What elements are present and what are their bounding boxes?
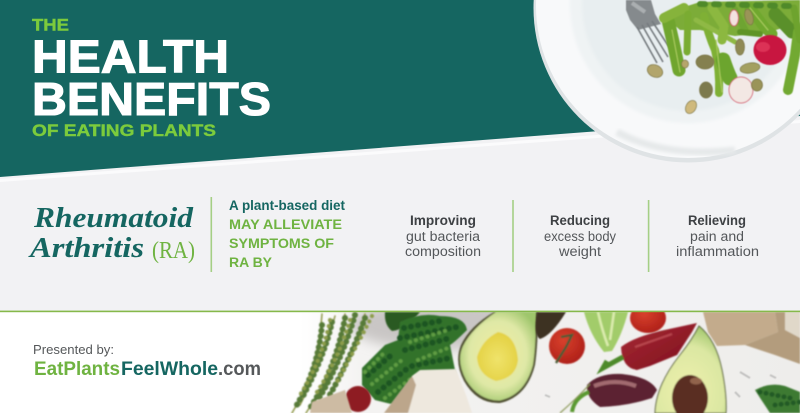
text block: improving: composition — [405, 244, 481, 259]
avocado right — [655, 326, 726, 413]
text block: improving: Improving — [410, 213, 476, 228]
thyme sprigs — [292, 314, 372, 413]
text block: relieving: inflammation — [676, 244, 759, 259]
fork — [626, 0, 673, 63]
kale — [362, 315, 467, 405]
divider: second — [648, 200, 649, 272]
paper bags — [310, 369, 472, 413]
footer top rule — [0, 311, 800, 312]
title — [32, 16, 271, 140]
eggplant pepper — [560, 374, 657, 413]
text block: reducing: weight — [558, 244, 601, 259]
tomato top — [629, 312, 667, 334]
panel: rheumatoid arthritis heading: Arthritis — [28, 232, 144, 264]
text block: reducing: excess body — [544, 229, 616, 244]
brown paper — [703, 312, 800, 364]
plate — [534, 0, 800, 162]
plate photo with salad — [534, 0, 800, 162]
title: THE — [32, 16, 69, 34]
red pepper — [603, 323, 697, 370]
text block: relieving — [676, 213, 759, 259]
presenter credit: EatPlants — [34, 358, 120, 380]
divider: heading — [210, 197, 212, 272]
title: HEALTH — [32, 30, 229, 82]
pumpkin seeds — [645, 8, 762, 116]
text block: relieving: pain and — [690, 229, 744, 244]
text block: diet statement — [229, 198, 345, 271]
text block: relieving: Relieving — [688, 213, 746, 228]
radish — [729, 10, 786, 103]
marble background — [0, 312, 800, 413]
text block: diet statement: MAY ALLEVIATE — [229, 217, 342, 233]
footer photo: vegetables on marble — [0, 312, 800, 413]
text block: diet statement: RA BY — [229, 255, 273, 271]
text block: reducing — [544, 213, 616, 259]
presenter credit — [33, 342, 261, 380]
text block: improving: gut bacteria — [406, 229, 481, 244]
panel: rheumatoid arthritis heading: (RA) — [152, 238, 195, 264]
arugula leaves — [662, 0, 800, 93]
dark pepper top — [536, 312, 566, 339]
text block: diet statement: A plant-based diet — [229, 198, 345, 213]
text block: diet statement: SYMPTOMS OF — [229, 236, 334, 252]
panel: rheumatoid arthritis heading — [28, 202, 195, 264]
text block: reducing: Reducing — [550, 213, 610, 228]
title: OF EATING PLANTS — [32, 121, 216, 140]
avocado left — [458, 312, 538, 403]
presenter credit: .com — [218, 358, 261, 380]
header panel: teal banner — [0, 0, 800, 182]
kale bottom right — [755, 385, 800, 413]
panel: rheumatoid arthritis heading: Rheumatoid — [33, 202, 194, 234]
tomato — [549, 328, 585, 364]
lettuce — [584, 312, 628, 352]
title: BENEFITS — [32, 73, 271, 125]
dark green pepper — [385, 312, 420, 331]
red pepper in bag — [345, 386, 371, 412]
presenter credit: FeelWhole — [121, 358, 218, 380]
divider: first — [512, 200, 514, 272]
text block: improving — [405, 213, 481, 259]
presenter credit: Presented by: — [33, 342, 114, 357]
